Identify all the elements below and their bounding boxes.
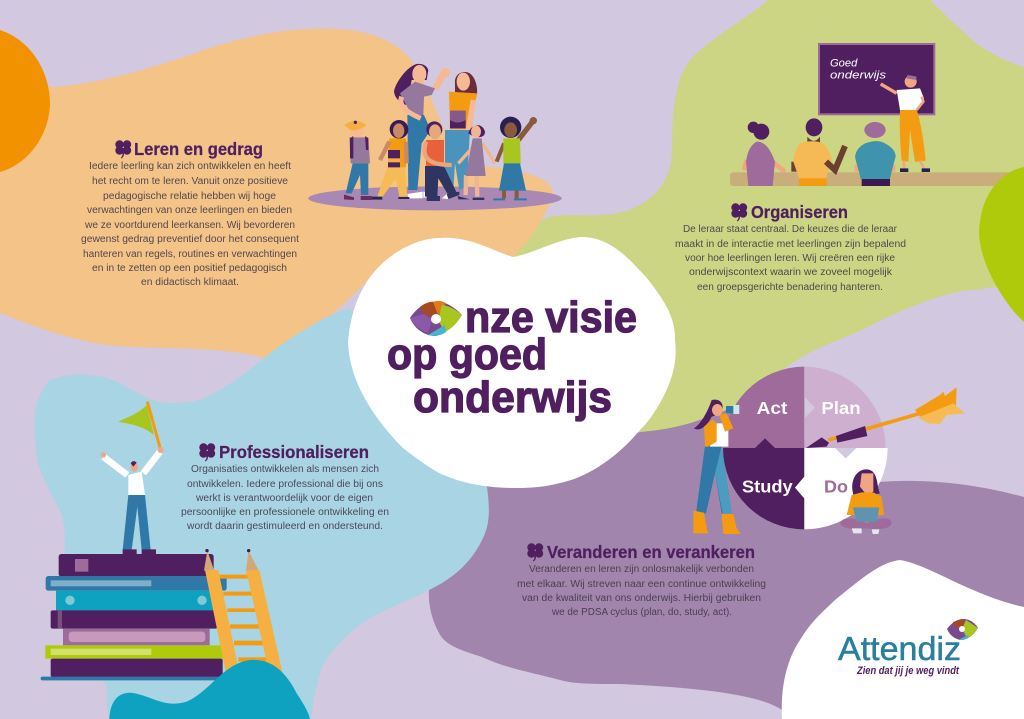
text block: Veranderen en verankeren: we de PDSA cyclus (plan, do, study, act). bbox=[551, 607, 732, 618]
text block: Professionaliseren: Professionaliseren bbox=[219, 442, 369, 462]
blob: purple bbox=[429, 405, 1024, 719]
segment: do bbox=[795, 448, 888, 529]
text block: Organiseren: Organiseren bbox=[751, 202, 848, 222]
illustration: teachers and children bbox=[308, 64, 562, 210]
blob: white center bbox=[348, 237, 676, 488]
segment: study bbox=[723, 438, 804, 529]
label: act: Act bbox=[757, 398, 787, 418]
text block: Professionaliseren: persoonlijke en professionele ontwikkeling en bbox=[181, 507, 389, 518]
blob: blue bbox=[34, 308, 489, 719]
text block: Leren en gedrag: gewenst gedrag preventief door het consequent bbox=[81, 234, 299, 245]
title bbox=[387, 293, 637, 422]
text block: Professionaliseren: ontwikkelen. Iedere professional die bij ons bbox=[187, 479, 383, 490]
text block: Organiseren: onderwijscontext waarin we zoveel mogelijk bbox=[689, 267, 893, 278]
label: study: Study bbox=[742, 477, 793, 497]
text block: Leren en gedrag: we ze voortdurend leerkansen. Wij bevorderen bbox=[84, 220, 295, 231]
illustration: stack of books bbox=[41, 402, 310, 719]
text block: Organiseren bbox=[675, 202, 906, 293]
text block: Leren en gedrag: het recht om te leren. Vanuit onze positieve bbox=[92, 176, 288, 187]
text block: Veranderen en verankeren: Veranderen en verankeren bbox=[547, 542, 755, 562]
label: plan: Plan bbox=[821, 398, 861, 418]
icon: eye logo bbox=[410, 301, 462, 336]
text block: Leren en gedrag: Leren en gedrag bbox=[134, 139, 263, 159]
illustration: girl with laptop bbox=[840, 469, 892, 534]
logo: Attendiz bbox=[838, 619, 978, 677]
illustration: woman with binoculars bbox=[693, 400, 741, 534]
text block: Leren en gedrag: en in te zetten op een positief pedagogisch bbox=[92, 263, 287, 274]
blob: bright green bbox=[979, 167, 1024, 322]
title: onderwijs bbox=[413, 373, 612, 422]
logo: Attendiz: Zien dat jij je weg vindt bbox=[856, 665, 960, 677]
text block: Veranderen en verankeren: van de kwaliteit van ons onderwijs. Hierbij gebruiken bbox=[522, 593, 761, 604]
text block: Veranderen en verankeren bbox=[517, 542, 766, 618]
icon: logo eye bbox=[947, 619, 978, 640]
text block: Professionaliseren: Organisaties ontwikkelen als mensen zich bbox=[191, 464, 379, 475]
title: nze visie bbox=[465, 293, 637, 342]
illustration: arrow bbox=[806, 387, 965, 448]
text block: Professionaliseren bbox=[181, 442, 389, 532]
board text: Goed bbox=[830, 58, 858, 70]
text block: Organiseren: een groepsgerichte benadering hanteren. bbox=[697, 282, 883, 293]
blob: green bbox=[505, 0, 1024, 434]
text block: Leren en gedrag bbox=[81, 139, 299, 288]
blob: dark orange bbox=[0, 30, 50, 172]
text block: Leren en gedrag: verwachtingen van onze leerlingen en bieden bbox=[87, 205, 292, 216]
text block: Organiseren: maakt in de interactie met leerlingen zijn bepalend bbox=[675, 239, 906, 250]
text block: Veranderen en verankeren: Veranderen en leren zijn onlosmakelijk verbonden bbox=[529, 564, 754, 575]
books bbox=[41, 554, 232, 680]
text block: Leren en gedrag: pedagogische relatie hebben wij hoge bbox=[103, 191, 276, 202]
illustration: classroom: onderwijs bbox=[830, 70, 887, 82]
text block: Professionaliseren: wordt daarin gestimuleerd en ondersteund. bbox=[186, 521, 383, 532]
logo: Attendiz: Attendiz bbox=[838, 630, 961, 667]
text block: Leren en gedrag: Iedere leerling kan zich ontwikkelen en heeft bbox=[89, 161, 291, 172]
text block: Veranderen en verankeren: met elkaar. Wij streven naar een continue ontwikkeling bbox=[517, 579, 766, 590]
ladder bbox=[204, 549, 283, 677]
blob: teal foreground bbox=[109, 660, 310, 719]
person on books bbox=[101, 447, 164, 555]
segment: plan bbox=[804, 367, 886, 448]
segment: act bbox=[723, 367, 804, 448]
label: do: Do bbox=[824, 477, 848, 497]
text block: Leren en gedrag: hanteren van regels, routines en verwachtingen bbox=[83, 249, 297, 260]
flag bbox=[118, 402, 161, 450]
text block: Leren en gedrag: en didactisch klimaat. bbox=[141, 277, 239, 288]
illustration: classroom bbox=[730, 44, 1023, 186]
text block: Organiseren: voor hoe leerlingen leren. Wij creëren een rijke bbox=[685, 253, 895, 264]
PDSA cycle bbox=[693, 367, 965, 534]
title: op goed bbox=[387, 330, 547, 379]
blob: white logo corner bbox=[782, 560, 1024, 719]
text block: Professionaliseren: werkt is verantwoordelijk voor de eigen bbox=[195, 493, 373, 504]
text block: Organiseren: De leraar staat centraal. De keuzes die de leraar bbox=[683, 224, 898, 235]
blob: orange bbox=[0, 28, 553, 358]
